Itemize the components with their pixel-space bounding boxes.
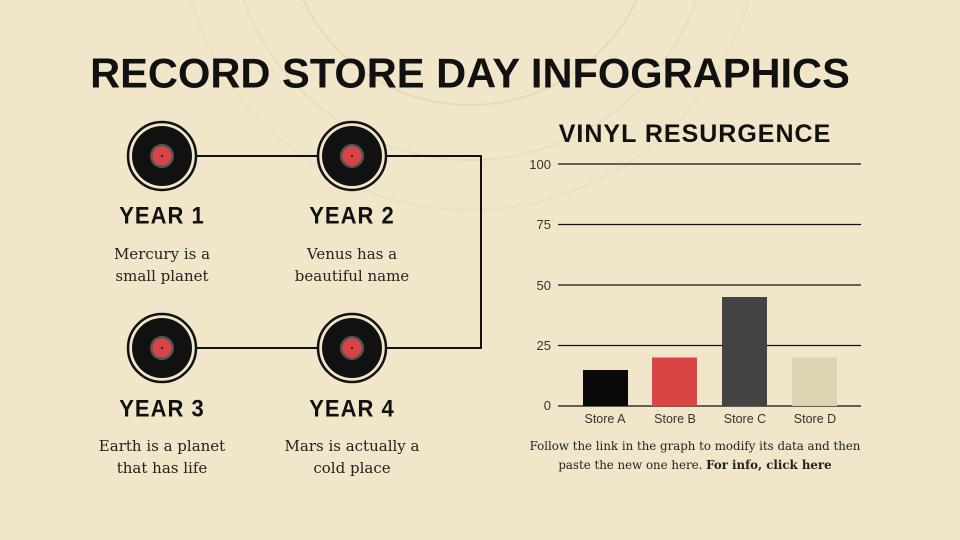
bar chart: 25 <box>537 338 551 353</box>
icon: record 1 <box>128 122 196 190</box>
bar chart: 0 <box>544 398 551 413</box>
bar chart: 75 <box>537 217 551 232</box>
text 3: Earth is a planet <box>99 437 225 455</box>
icon: record 4 <box>318 314 386 382</box>
text 2: beautiful name <box>295 267 409 285</box>
year 2: YEAR 2 <box>309 202 395 229</box>
text 1: Mercury is a <box>114 245 210 263</box>
title: RECORD STORE DAY INFOGRAPHICS <box>90 51 850 97</box>
year 4: YEAR 4 <box>309 395 395 422</box>
bar chart: 50 <box>537 278 551 293</box>
text 4: cold place <box>313 459 391 477</box>
timeline connectors and records <box>126 120 482 384</box>
bar chart: Store B <box>654 412 696 426</box>
year 3: YEAR 3 <box>119 395 205 422</box>
year 1: YEAR 1 <box>119 202 205 229</box>
bar chart: Store A <box>584 412 626 426</box>
text 2: Venus has a <box>307 245 397 263</box>
text 4 <box>285 437 419 477</box>
bar chart: 100 <box>529 157 551 172</box>
text 1: small planet <box>115 267 209 285</box>
text 3 <box>99 437 225 477</box>
icon: record 3 <box>128 314 196 382</box>
text 2 <box>295 245 409 285</box>
bar chart: Store D <box>794 412 836 426</box>
text 3: that has life <box>117 459 207 477</box>
icon: record 2 <box>318 122 386 190</box>
caption: Follow the link in the graph to modify its data and then paste the new one here. For info, click here <box>530 439 860 472</box>
chart title: VINYL RESURGENCE <box>559 120 831 148</box>
bar chart: Store C <box>724 412 766 426</box>
text 4: Mars is actually a <box>285 437 419 455</box>
text 1 <box>114 245 210 285</box>
